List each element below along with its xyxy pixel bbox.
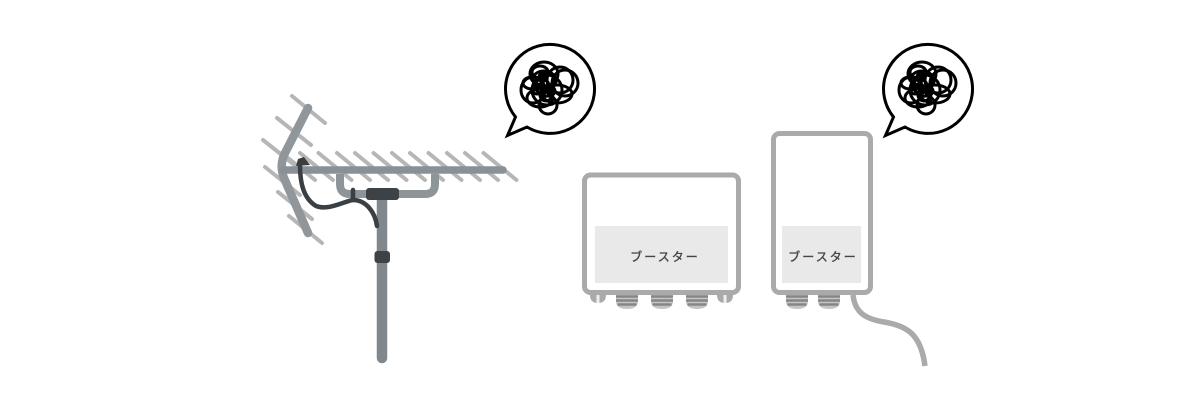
antenna boom [283, 166, 503, 174]
label text: ブースター [630, 249, 700, 264]
antenna cable [300, 165, 377, 226]
side stubs [590, 295, 733, 303]
antenna mast [377, 196, 387, 358]
label text: ブースター [788, 249, 858, 264]
housing [584, 175, 738, 292]
speech bubble 1 [506, 44, 595, 136]
label plate [782, 226, 861, 283]
booster 1 [584, 175, 738, 309]
antenna director elements [282, 153, 516, 180]
antenna reflector arm [282, 108, 308, 233]
antenna reflector elements [263, 96, 325, 243]
upper clamp [366, 188, 399, 200]
antenna bracket [340, 174, 435, 194]
housing [774, 134, 870, 292]
cable connector [296, 157, 310, 166]
power cable [853, 295, 925, 366]
lower clamp [374, 251, 390, 263]
label plate [595, 226, 728, 283]
connectors [786, 295, 840, 309]
connectors [616, 295, 708, 309]
booster 2 [774, 134, 925, 366]
speech bubble 2 [884, 44, 973, 136]
antenna [263, 96, 516, 358]
